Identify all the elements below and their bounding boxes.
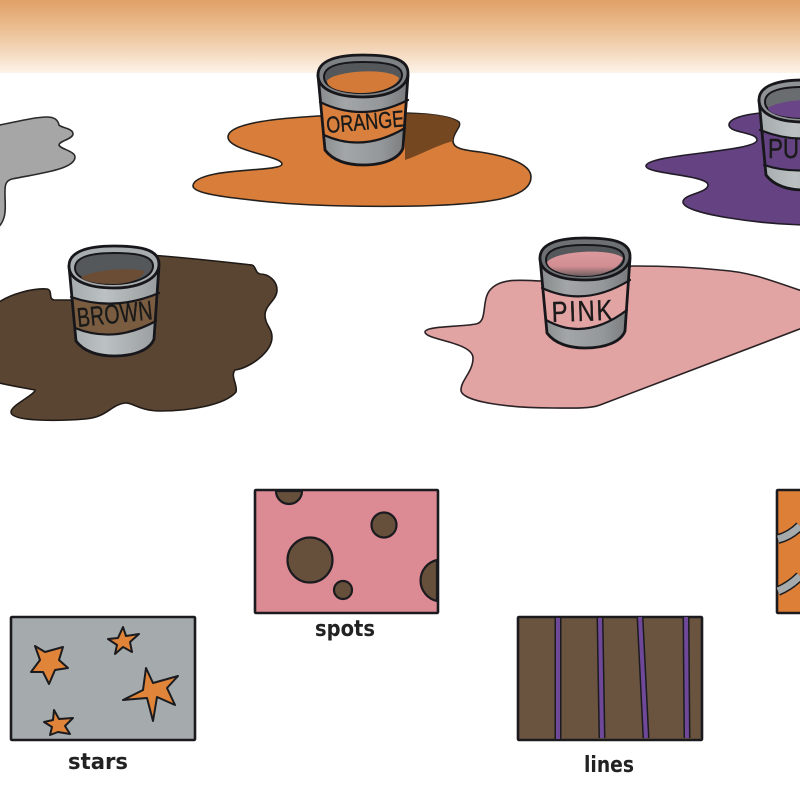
- header gradient band: [0, 0, 800, 73]
- puddle: purple: [646, 113, 800, 225]
- paint can: pink: [540, 238, 630, 348]
- label: lines: lines: [584, 753, 634, 778]
- swatch: zigzag: [777, 490, 800, 613]
- paint can: purple: [759, 80, 800, 190]
- puddle: grey: [0, 117, 75, 230]
- puddle: pink: [425, 266, 800, 408]
- can label: ORANGE: ORANGE: [325, 106, 405, 139]
- paint can: orange: [318, 55, 408, 165]
- swatch: lines: [518, 617, 702, 740]
- label: spots: spots: [315, 617, 375, 642]
- swatch: stars: [11, 617, 195, 740]
- paint can: brown: [69, 246, 159, 356]
- label: stars: stars: [68, 750, 128, 775]
- can label: PINK: PINK: [551, 294, 613, 329]
- swatch: spots: [255, 490, 438, 613]
- can label: BROWN: BROWN: [75, 295, 154, 333]
- puddle: brown: [0, 255, 277, 420]
- puddle: orange: [193, 113, 531, 206]
- can shadow: orange: [405, 114, 459, 160]
